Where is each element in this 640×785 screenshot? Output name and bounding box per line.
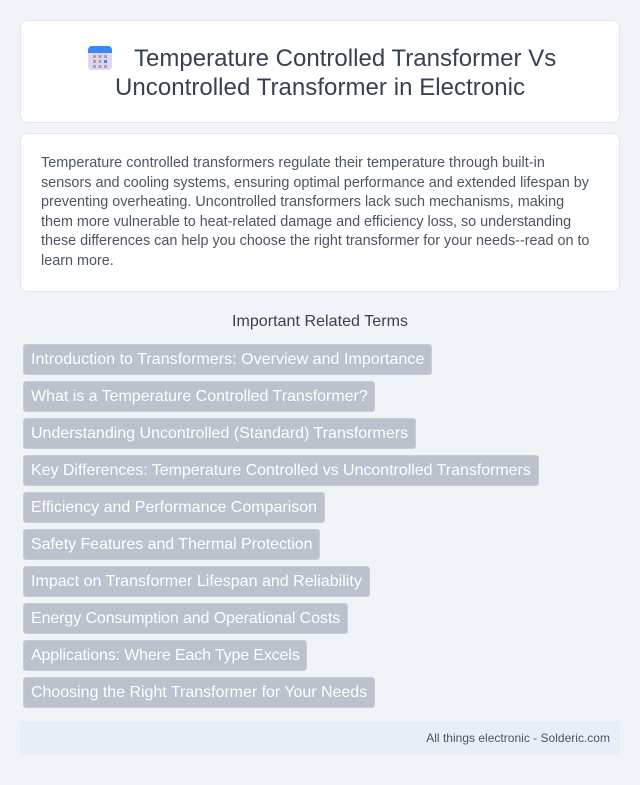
footer <box>20 721 620 755</box>
term 9: Applications: Where Each Type Excels <box>31 647 300 664</box>
term 7 <box>23 566 370 597</box>
term 6: Safety Features and Thermal Protection <box>31 536 313 553</box>
term 8: Energy Consumption and Operational Costs <box>31 610 340 627</box>
term 10 <box>23 677 375 708</box>
term 7: Impact on Transformer Lifespan and Reliability <box>31 573 362 590</box>
description text: sensors and cooling systems, ensuring optimal performance and extended lifespan by <box>41 175 589 191</box>
term 8 <box>23 603 348 634</box>
term 10: Choosing the Right Transformer for Your Needs <box>31 684 367 701</box>
term 4: Key Differences: Temperature Controlled vs Uncontrolled Transformers <box>31 462 531 479</box>
term 9 <box>23 640 307 671</box>
term 5: Efficiency and Performance Comparison <box>31 499 317 516</box>
term 1 <box>23 344 432 375</box>
description text: learn more. <box>41 253 114 269</box>
description text: Temperature controlled transformers regulate their temperature through built-in <box>41 155 545 171</box>
description text: preventing overheating. Uncontrolled transformers lack such mechanisms, making <box>41 194 564 210</box>
description text: them more vulnerable to heat-related damage and efficiency loss, so understanding <box>41 214 571 230</box>
term 4 <box>23 455 539 486</box>
term 2 <box>23 381 375 412</box>
footer text: All things electronic - Solderic.com <box>426 731 610 745</box>
term 2: What is a Temperature Controlled Transformer? <box>31 388 368 405</box>
icon: calendar <box>88 46 112 70</box>
term 6 <box>23 529 320 560</box>
section heading: Important Related Terms <box>232 313 408 330</box>
term 3 <box>23 418 416 449</box>
term 1: Introduction to Transformers: Overview and Importance <box>31 351 424 368</box>
term 5 <box>23 492 325 523</box>
title card <box>20 20 620 123</box>
term 3: Understanding Uncontrolled (Standard) Transformers <box>31 425 408 442</box>
title: Uncontrolled Transformer in Electronic <box>115 74 525 101</box>
description text <box>41 155 589 269</box>
title <box>115 45 556 101</box>
related terms list <box>23 344 539 708</box>
title: Temperature Controlled Transformer Vs <box>134 45 556 72</box>
description card <box>20 133 620 292</box>
description text: these differences can help you choose the right transformer for your needs--read on to <box>41 233 589 249</box>
